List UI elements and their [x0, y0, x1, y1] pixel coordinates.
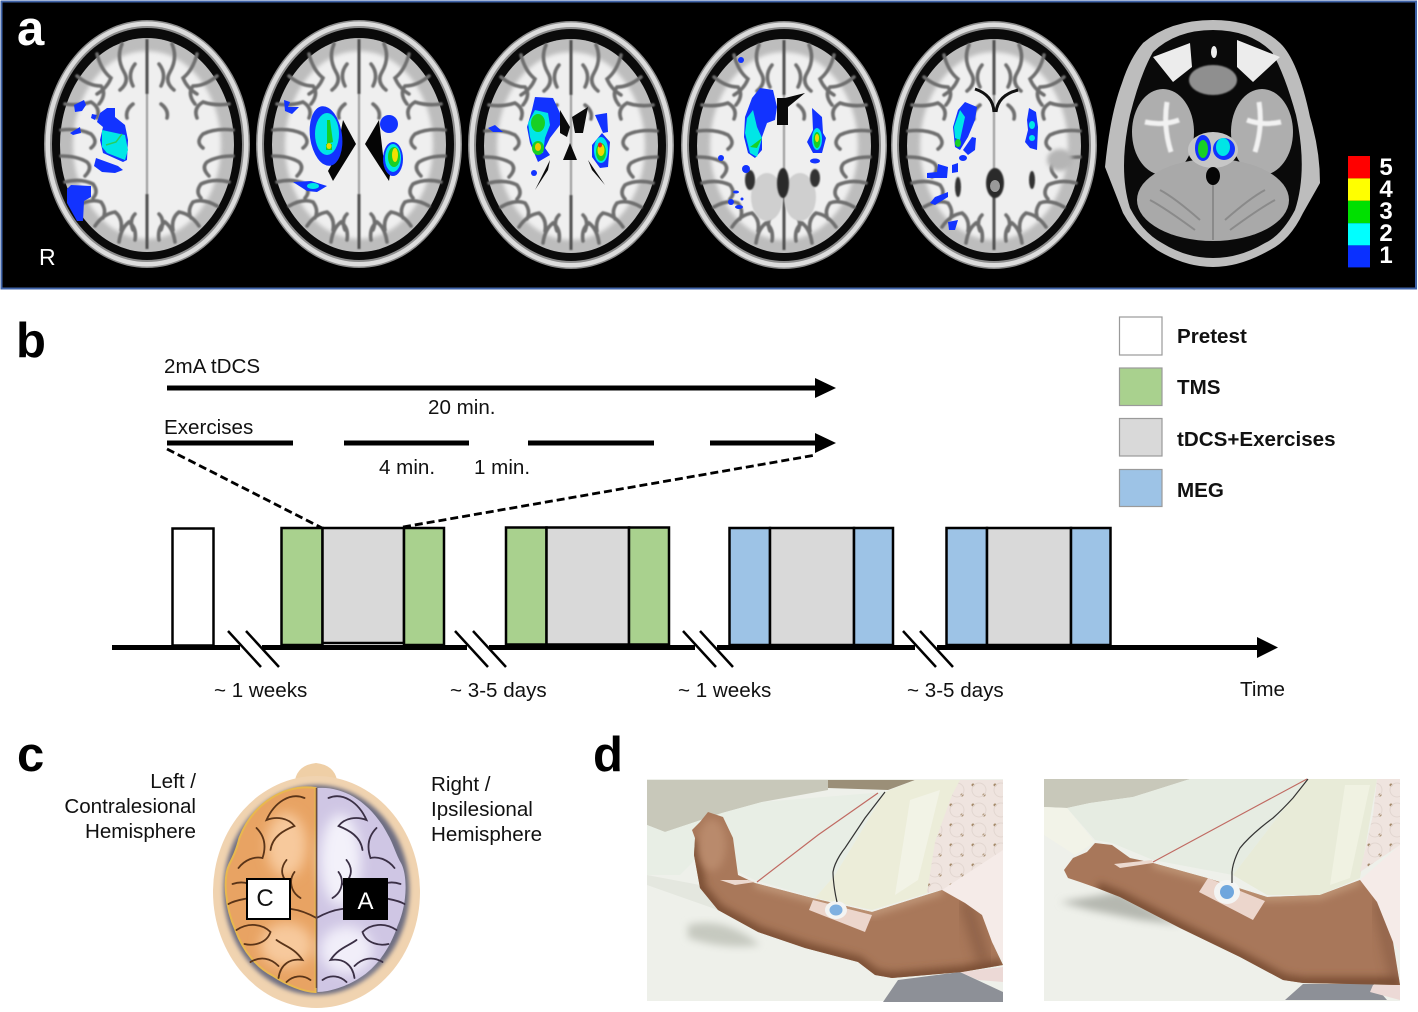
- electrode A anode: A: [357, 888, 374, 915]
- exercises arrow: [164, 416, 836, 479]
- brain slice 4: [681, 21, 887, 269]
- time axis: [112, 637, 1278, 658]
- brain slice 1: [44, 20, 250, 268]
- legend: MEG: [1177, 479, 1224, 502]
- panel label a: a: [17, 2, 45, 56]
- right hemisphere label: Ipsilesional: [431, 798, 533, 821]
- session: MEG 2: [946, 528, 1110, 645]
- left hemisphere label: Hemisphere: [85, 820, 196, 843]
- right hemisphere label: Right /: [431, 773, 491, 796]
- electrode C cathode: [247, 879, 290, 919]
- session: pretest: [172, 528, 214, 646]
- session: TMS 1: [282, 528, 444, 645]
- legend: tDCS+Exercises: [1177, 428, 1336, 451]
- colour scale legend: [1348, 154, 1393, 269]
- brain slice 5: [891, 21, 1097, 269]
- electrode A anode: [343, 878, 388, 920]
- panel label b: b: [16, 314, 46, 368]
- label R: R: [39, 244, 56, 270]
- tDCS arrow: 2mA tDCS: [164, 355, 260, 378]
- colour scale legend: 4: [1379, 176, 1393, 203]
- interval labels: Time: [1240, 678, 1285, 701]
- panel label c: c: [17, 728, 44, 782]
- colour scale legend: 1: [1379, 242, 1393, 269]
- brain slice 2: [256, 20, 462, 268]
- interval labels: ~ 1 weeks: [678, 679, 771, 702]
- exercises arrow: Exercises: [164, 416, 253, 439]
- tDCS arrow: [164, 355, 836, 419]
- legend: Pretest: [1177, 325, 1247, 348]
- electrode C cathode: C: [256, 885, 274, 912]
- session: TMS 2: [506, 528, 669, 644]
- colour scale legend: 5: [1379, 154, 1393, 181]
- photo: wrist flexion: [1044, 779, 1400, 1001]
- exercises arrow: 1 min.: [474, 456, 530, 479]
- panel d: arm photographs: [593, 728, 1400, 1002]
- right hemisphere label: Hemisphere: [431, 823, 542, 846]
- brain slice 6: [1105, 20, 1320, 267]
- interval labels: ~ 1 weeks: [214, 679, 307, 702]
- colour scale legend: 3: [1379, 198, 1393, 225]
- legend: TMS: [1177, 376, 1220, 399]
- panel b: study timeline: [16, 314, 1336, 702]
- dashed zoom lines: [167, 449, 816, 528]
- legend: [1120, 317, 1336, 506]
- session: MEG 1: [730, 528, 893, 645]
- interval labels: ~ 3-5 days: [907, 679, 1004, 702]
- panel a: MRI lesion overlays: [2, 2, 1416, 288]
- colour scale legend: 2: [1379, 220, 1393, 247]
- photo: wrist extension: [647, 779, 1003, 1002]
- left hemisphere label: Contralesional: [64, 795, 196, 818]
- brain slice 3: [468, 21, 674, 269]
- exercises arrow: 4 min.: [379, 456, 435, 479]
- left hemisphere label: Left /: [150, 770, 196, 793]
- panel c: electrode montage: [17, 728, 542, 1008]
- interval labels: [214, 678, 1285, 702]
- head and brain illustration: [213, 763, 420, 1008]
- tDCS arrow: 20 min.: [428, 396, 496, 419]
- axis break marks: [228, 631, 953, 667]
- interval labels: ~ 3-5 days: [450, 679, 547, 702]
- panel label d: d: [593, 728, 623, 782]
